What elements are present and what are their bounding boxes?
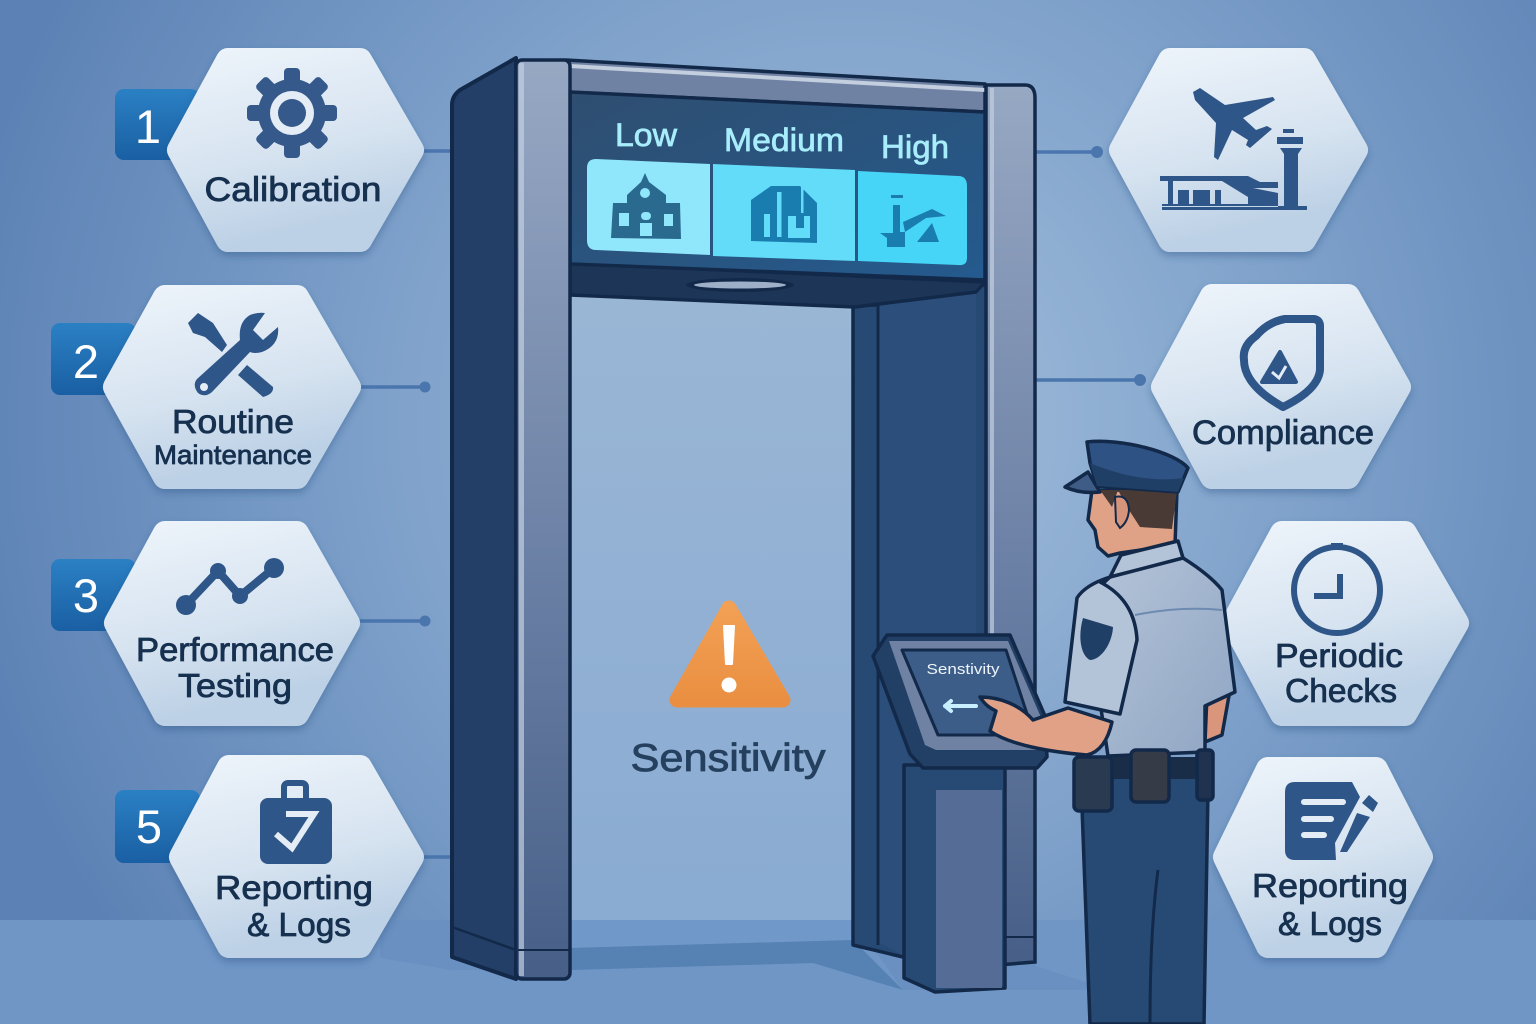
panel: airport bbox=[1121, 60, 1356, 240]
shirt bbox=[1085, 543, 1235, 756]
screen arrow bbox=[945, 701, 976, 711]
label: Performance bbox=[136, 631, 334, 668]
screen label: Senstivity bbox=[926, 661, 1000, 678]
ear bbox=[1115, 497, 1129, 528]
connector lines bbox=[355, 146, 1146, 857]
hexagon checks bbox=[1233, 533, 1457, 714]
trousers bbox=[1081, 770, 1208, 1024]
label bbox=[215, 869, 373, 943]
gate opening bbox=[570, 296, 853, 920]
panel: reporting and logs left bbox=[115, 767, 412, 946]
left pillar base band bbox=[518, 949, 569, 951]
icon: plane and terminal bbox=[1160, 88, 1307, 210]
label: Reporting bbox=[215, 869, 373, 906]
label: Routine bbox=[172, 403, 294, 440]
badge 2: 2 bbox=[73, 335, 99, 388]
icon: warehouse bbox=[751, 186, 817, 243]
right pillar base band bbox=[1005, 936, 1034, 938]
panel: calibration bbox=[115, 60, 412, 240]
right pillar bbox=[986, 85, 1035, 966]
label: Testing bbox=[178, 667, 292, 704]
neck and head bbox=[1088, 490, 1177, 556]
badge 5 bbox=[115, 790, 200, 863]
icon: airport structure bbox=[880, 195, 946, 247]
icon: clipboard check bbox=[260, 783, 332, 864]
badge 1: 1 bbox=[135, 100, 161, 153]
scale panel: low bbox=[587, 159, 710, 255]
icon: document and pencil bbox=[1285, 782, 1378, 860]
label bbox=[1252, 867, 1408, 942]
warning triangle bbox=[677, 608, 783, 700]
sleeve bbox=[1065, 577, 1137, 714]
icon: gear bbox=[247, 68, 337, 158]
kiosk body bbox=[873, 635, 1047, 768]
icon: clock bbox=[1294, 543, 1380, 633]
duty belt bbox=[1074, 750, 1213, 811]
control kiosk bbox=[873, 635, 1047, 992]
far hand bbox=[1205, 690, 1230, 742]
panel: routine maintenance bbox=[51, 297, 349, 477]
label bbox=[154, 403, 312, 470]
label: & Logs bbox=[247, 906, 351, 943]
scale panel: high bbox=[858, 171, 967, 265]
arm and pointing hand bbox=[980, 697, 1112, 755]
trouser seam bbox=[1150, 870, 1158, 1024]
hexagon 1 bbox=[179, 60, 412, 240]
panel: periodic checks bbox=[1233, 533, 1457, 714]
display panel bbox=[570, 92, 985, 280]
panel: compliance bbox=[1163, 296, 1399, 477]
icon: school bbox=[611, 173, 681, 239]
hexagon logs right bbox=[1225, 769, 1421, 946]
label: Compliance bbox=[1192, 414, 1374, 452]
ceiling light bbox=[686, 278, 794, 292]
label: Checks bbox=[1285, 672, 1397, 709]
left pillar bbox=[516, 60, 570, 979]
label bbox=[136, 631, 334, 704]
right pillar highlight bbox=[990, 88, 994, 963]
collar bbox=[1110, 541, 1183, 577]
panel: reporting and logs right bbox=[1225, 769, 1421, 946]
hexagon 5 bbox=[181, 767, 412, 946]
hair bbox=[1100, 490, 1177, 529]
label: Periodic bbox=[1275, 637, 1403, 674]
panel: performance testing bbox=[51, 533, 348, 714]
sensitivity scale labels bbox=[615, 117, 949, 165]
officer bbox=[980, 441, 1235, 1024]
hat bbox=[1065, 441, 1188, 492]
sensitivity scale labels: High bbox=[881, 129, 949, 165]
top beam bbox=[566, 60, 985, 112]
label: Reporting bbox=[1252, 867, 1408, 904]
badge 3 bbox=[51, 559, 136, 631]
underside of beam bbox=[570, 263, 985, 307]
badge 1 bbox=[115, 89, 200, 160]
label bbox=[1275, 637, 1403, 709]
sensitivity scale labels: Low bbox=[615, 117, 678, 153]
left pillar highlight bbox=[519, 63, 524, 976]
hexagon 3 bbox=[116, 533, 348, 714]
kiosk stand bbox=[904, 765, 1005, 992]
side wall left bbox=[452, 58, 516, 979]
label: & Logs bbox=[1278, 905, 1382, 942]
right inner jamb bbox=[853, 285, 990, 965]
badge 3: 3 bbox=[73, 569, 99, 622]
label: Maintenance bbox=[154, 440, 312, 470]
jamb edge bbox=[876, 305, 880, 945]
shirt seam bbox=[1135, 609, 1222, 615]
hexagon 2 bbox=[115, 297, 349, 477]
badge 5: 5 bbox=[136, 800, 162, 853]
shoulder patch bbox=[1080, 618, 1113, 660]
hexagon compliance bbox=[1163, 296, 1399, 477]
gate floor shadow bbox=[571, 940, 903, 990]
sensitivity label: Sensitivity bbox=[630, 737, 826, 780]
kiosk screen bbox=[902, 650, 1034, 735]
icon: trend line bbox=[176, 558, 284, 615]
security gate bbox=[452, 58, 1035, 990]
sensitivity scale labels: Medium bbox=[724, 122, 844, 158]
icon: shield bbox=[1244, 319, 1320, 407]
beam highlight bbox=[570, 64, 985, 92]
hexagon airport bbox=[1121, 60, 1356, 240]
side wall base line bbox=[452, 927, 516, 950]
jamb shading bbox=[878, 288, 976, 960]
icon: tools bbox=[188, 313, 278, 397]
scale panel: medium bbox=[713, 164, 855, 261]
kiosk bezel bbox=[889, 641, 1043, 750]
floor under gate bbox=[570, 920, 853, 948]
badge 2 bbox=[51, 323, 136, 395]
label: Calibration bbox=[204, 171, 382, 209]
